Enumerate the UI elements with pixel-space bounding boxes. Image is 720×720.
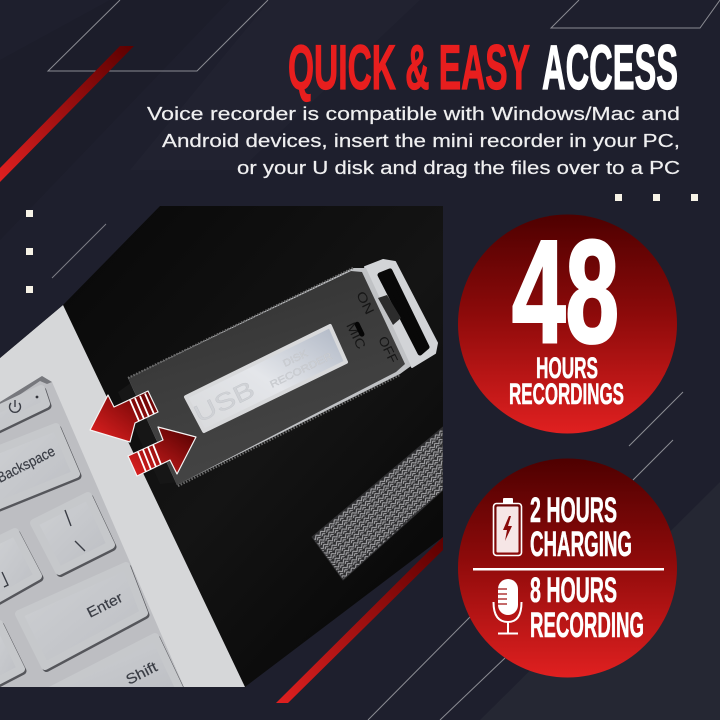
red diagonal stripe top left [0, 46, 134, 182]
recorder: OFF [375, 334, 401, 366]
laptop body [0, 305, 245, 696]
outline parallelogram top left [48, 0, 268, 71]
circle: 48 hours recordings: 48 [512, 210, 619, 373]
recorder: DISK [281, 348, 310, 370]
dots left [26, 210, 33, 293]
recorder: USB [190, 376, 259, 428]
description text: or your U disk and drag the files over to a PC [237, 158, 680, 178]
dots top right [615, 194, 698, 201]
laptop body: Shift [124, 659, 160, 689]
recorder [118, 260, 437, 486]
icon: battery [494, 498, 522, 556]
circle: 48 hours recordings: HOURS [536, 352, 598, 385]
text: 2 hours charging [530, 491, 632, 564]
circle: 48 hours recordings [458, 210, 677, 434]
text: 8 hours recording [530, 571, 644, 645]
arrow: out to laptop [90, 391, 158, 442]
circle: 48 hours recordings: RECORDINGS [509, 378, 624, 411]
fabric strap [312, 427, 443, 580]
keys [0, 389, 182, 694]
icon: microphone [494, 579, 522, 634]
text: 8 hours recording: 8 HOURS [530, 571, 617, 610]
metal loop [365, 260, 437, 367]
laptop body: Enter [85, 590, 126, 622]
shadows under keys [0, 391, 184, 696]
recorder: MIC [343, 320, 369, 351]
outline parallelogram top right [551, 0, 720, 28]
text: 2 hours charging: CHARGING [530, 525, 632, 564]
recorder: RECORDER [268, 351, 334, 391]
arrow: in to recorder [128, 427, 196, 476]
red diagonal stripe bottom [276, 537, 443, 703]
recorder: ON [353, 289, 377, 317]
description text [147, 104, 680, 178]
description text: Voice recorder is compatible with Windows/Mac and [147, 104, 680, 124]
description text: Android devices, insert the mini recorder in your PC, [162, 131, 680, 151]
photo: laptop and USB recorder [0, 206, 443, 696]
text: 2 hours charging: 2 HOURS [530, 491, 617, 530]
circle: charging and recording [458, 458, 677, 678]
